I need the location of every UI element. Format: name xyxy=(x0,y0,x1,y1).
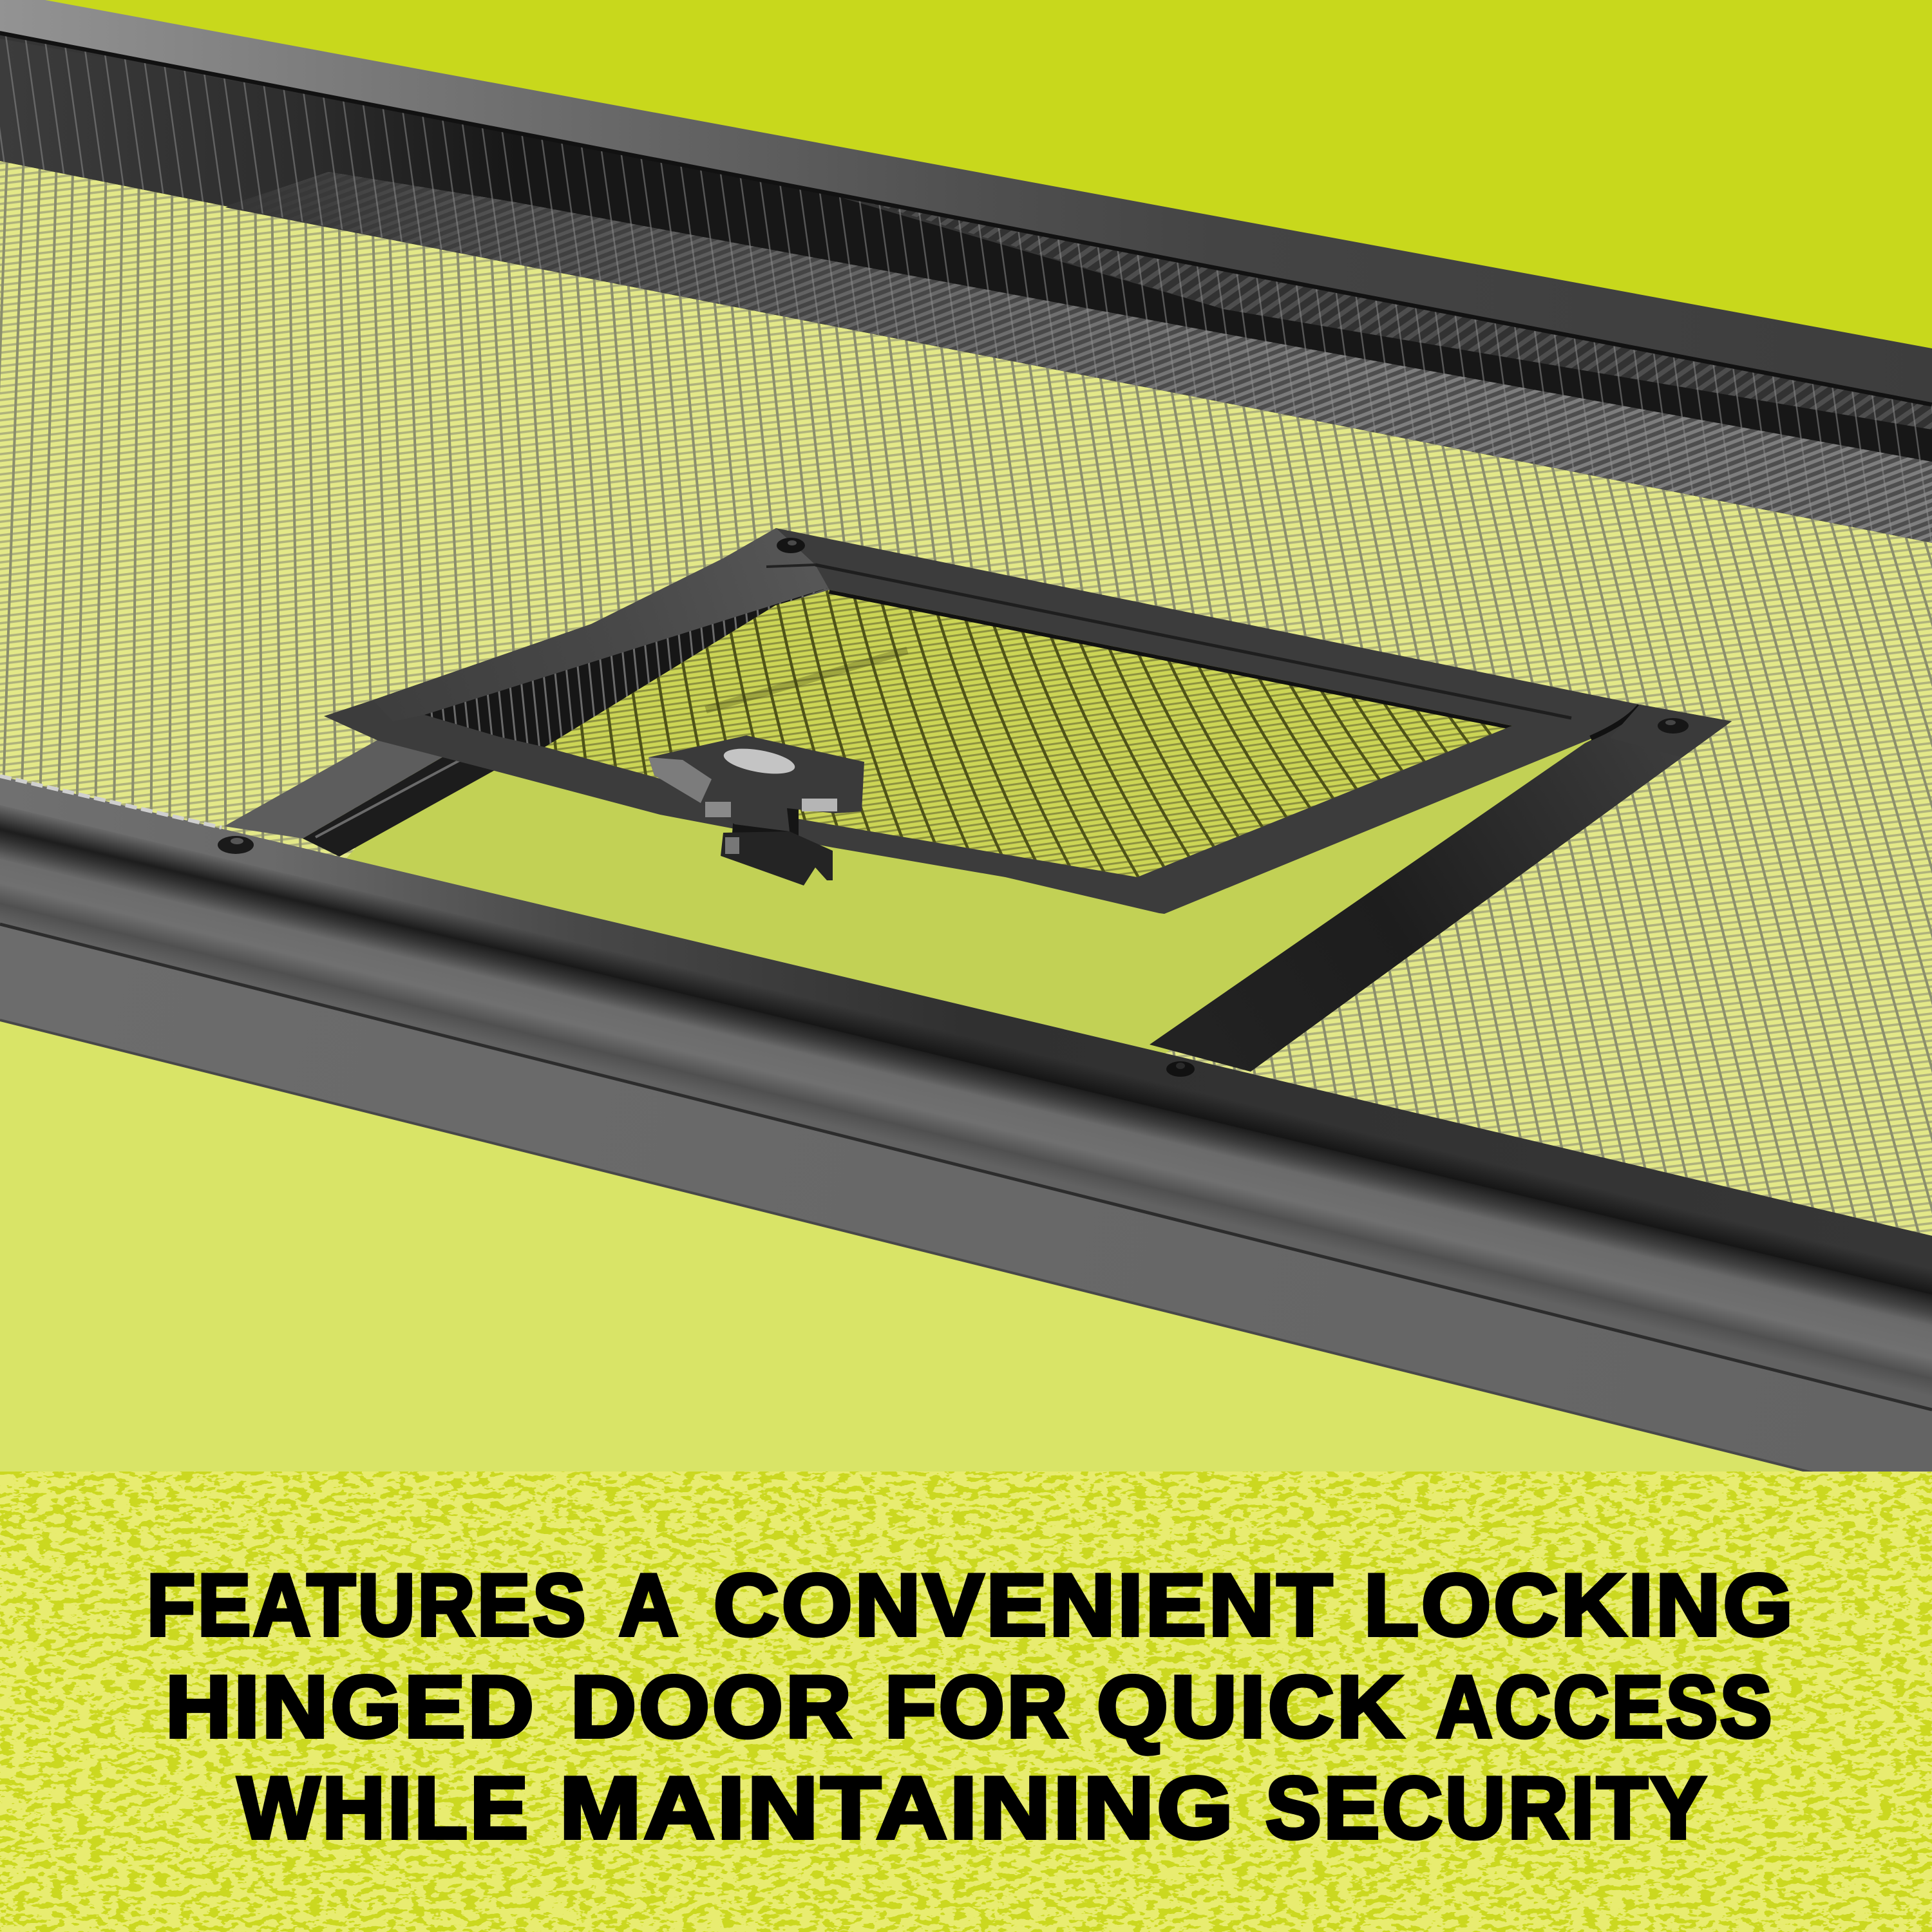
top frame rail xyxy=(0,0,1932,402)
caption line 1 xyxy=(147,1556,1795,1654)
bottom frame rail xyxy=(0,776,1932,1502)
caption line 3: SECURITY xyxy=(1265,1759,1709,1857)
door frame xyxy=(324,528,1640,914)
screw: rail right xyxy=(1166,1061,1195,1077)
caption line 1: A xyxy=(619,1556,681,1654)
caption line 3: WHILE xyxy=(238,1759,531,1857)
latch lower body xyxy=(721,831,833,886)
door joint xyxy=(1591,706,1640,738)
caption line 3 xyxy=(238,1759,1709,1857)
hinged opening showing background xyxy=(339,728,1610,1063)
door inner wall mesh xyxy=(424,587,829,747)
background: lower pale green xyxy=(0,773,1932,1475)
caption line 2 xyxy=(166,1658,1774,1756)
door lock latch xyxy=(649,735,864,886)
caption line 2: DOOR xyxy=(571,1658,854,1756)
door window mesh xyxy=(545,590,1512,877)
latch upper body xyxy=(649,735,864,831)
screw: rail left xyxy=(218,836,254,854)
caption line 3: MAINTAINING xyxy=(560,1759,1236,1857)
caption line 2: ACCESS xyxy=(1436,1658,1774,1756)
caption line 2: HINGED xyxy=(166,1658,536,1756)
right corner plate xyxy=(1610,705,1732,757)
screw: door right xyxy=(1658,718,1689,734)
mesh screen panel xyxy=(0,129,1932,1288)
caption line 1: LOCKING xyxy=(1364,1556,1795,1654)
caption line 1: CONVENIENT xyxy=(714,1556,1335,1654)
background: top green xyxy=(0,0,1932,902)
left hinge strut xyxy=(224,739,496,857)
latch stem xyxy=(731,799,799,857)
right hinge strut xyxy=(1150,705,1732,1072)
hinged door xyxy=(324,528,1668,914)
caption text xyxy=(147,1556,1795,1857)
latch logo disc xyxy=(722,744,797,778)
caption line 2: QUICK xyxy=(1097,1658,1406,1756)
door left rail highlight xyxy=(373,528,829,721)
screw: door top left xyxy=(777,538,805,553)
upper mesh fold band xyxy=(0,0,1932,547)
caption line 2: FOR xyxy=(885,1658,1070,1756)
textured caption band xyxy=(0,1472,1932,1932)
caption line 1: FEATURES xyxy=(147,1556,588,1654)
